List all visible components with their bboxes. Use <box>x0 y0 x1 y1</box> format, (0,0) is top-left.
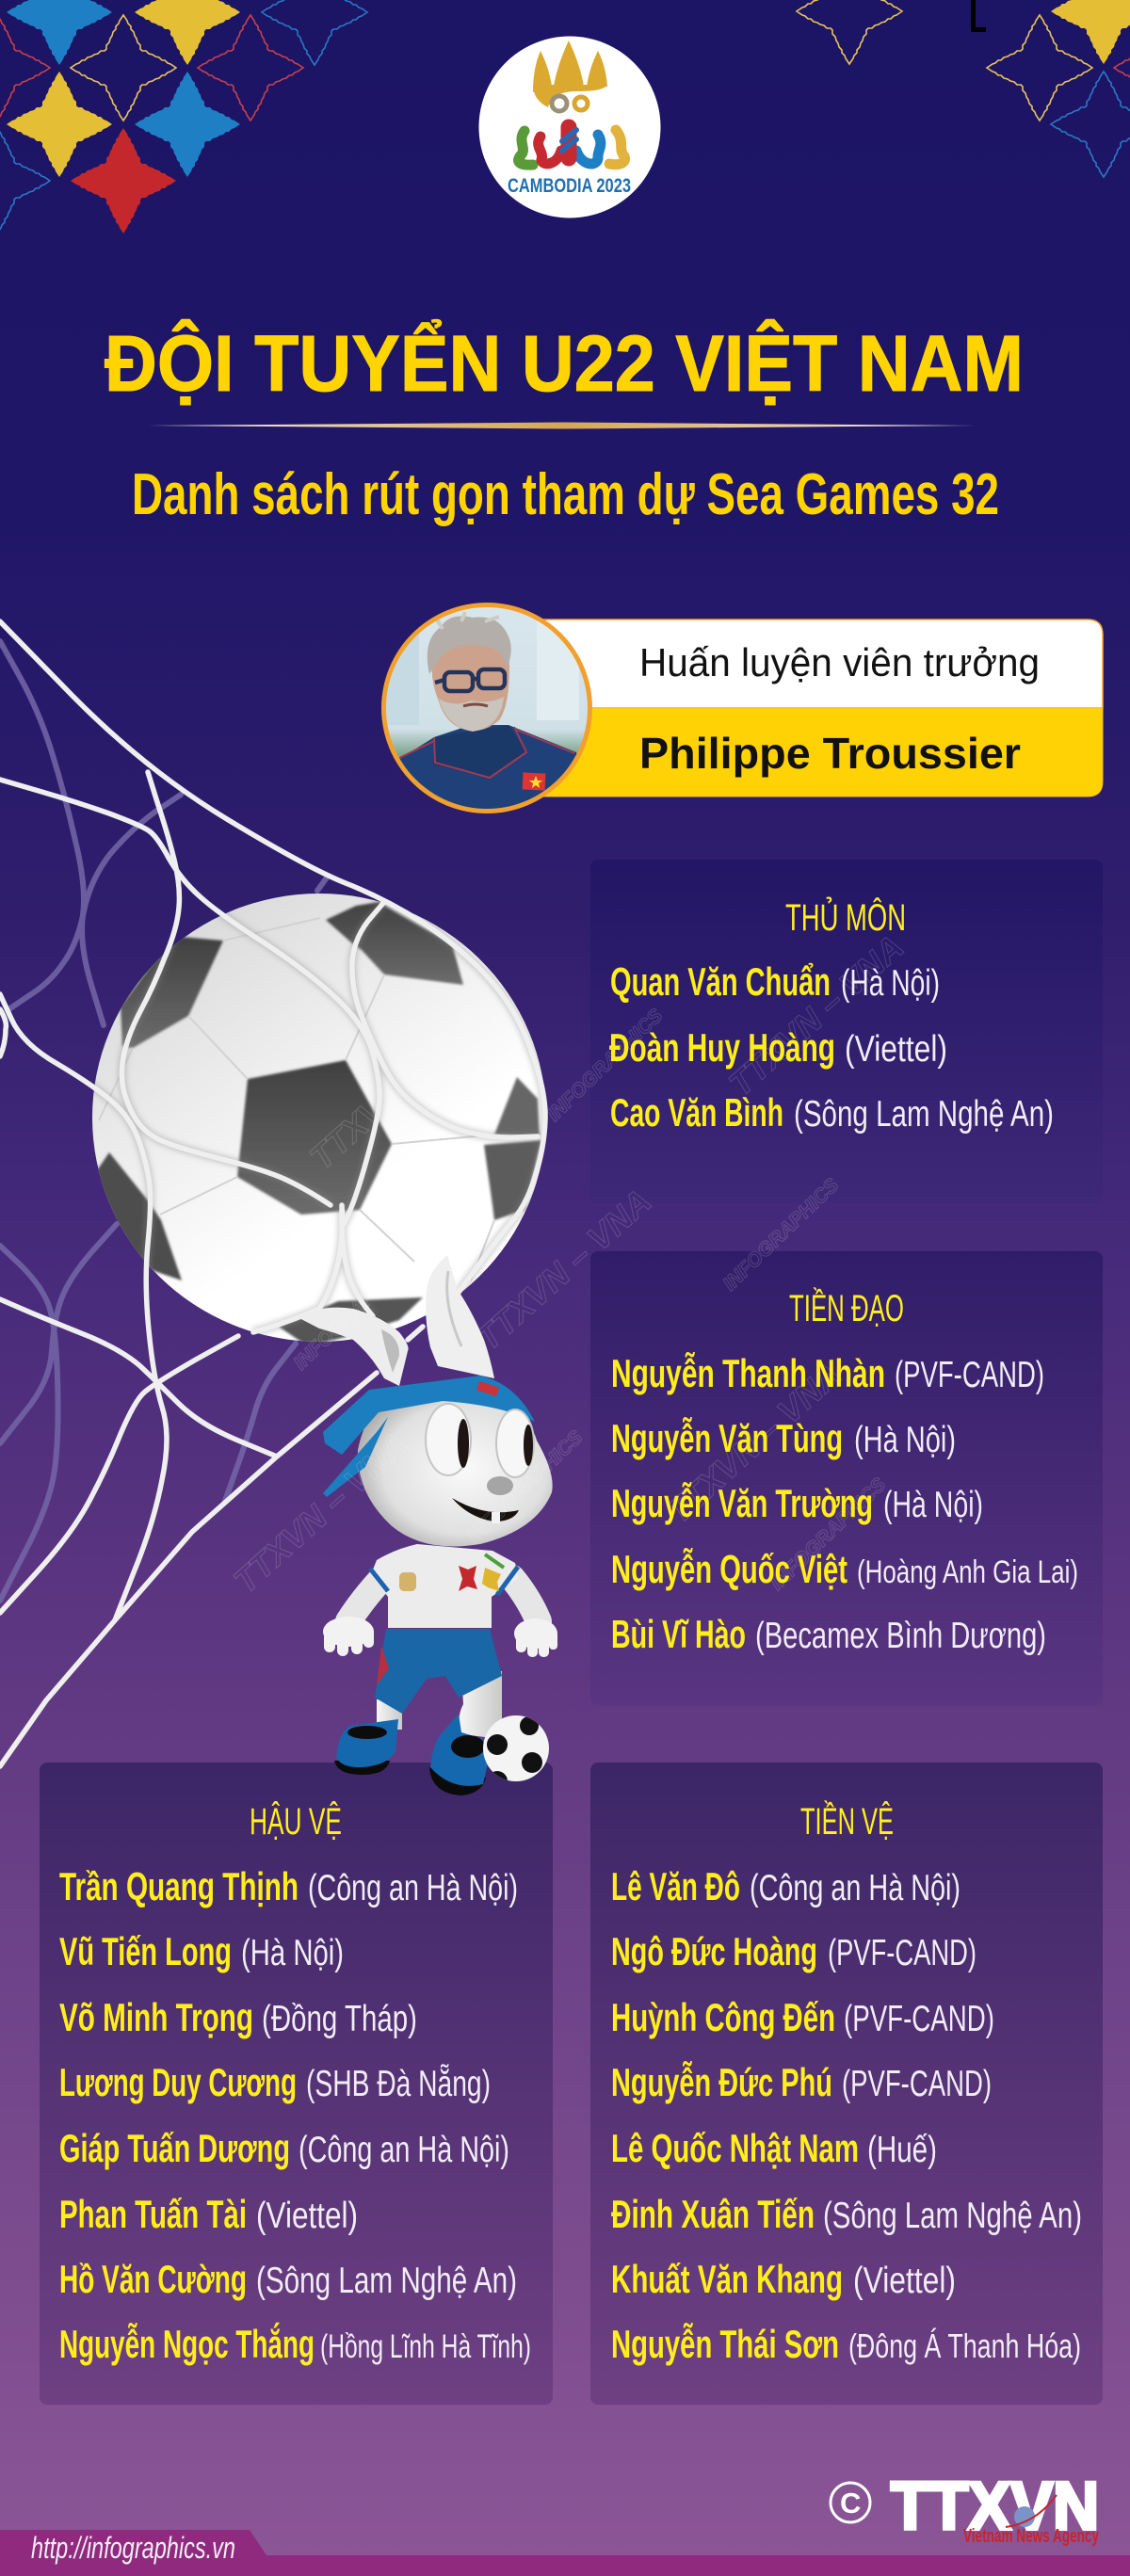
hands <box>323 1617 557 1657</box>
player: Nguyễn Ngọc Thắng: Nguyễn Ngọc Thắng <box>59 2321 315 2366</box>
player: Lê Văn Đô: Lê Văn Đô <box>611 1864 740 1908</box>
headband flag <box>476 1381 499 1396</box>
player: Khuất Văn Khang: Khuất Văn Khang <box>611 2257 843 2301</box>
player: Lương Duy Cương: Lương Duy Cương <box>59 2060 297 2104</box>
player: Đinh Xuân Tiến: Đinh Xuân Tiến <box>611 2192 815 2236</box>
watermarks: INFOGRAPHICS <box>766 1473 890 1595</box>
player: Vũ Tiến Long: Vũ Tiến Long <box>59 1929 232 1973</box>
player: Đoàn Huy Hoàng: (Viettel) <box>845 1029 947 1070</box>
shirt <box>371 1544 519 1628</box>
player: Lê Văn Đô <box>611 1864 960 1908</box>
watermarks: TTXVN – VNA <box>721 927 911 1103</box>
logo label: CAMBODIA 2023 <box>508 175 631 197</box>
watermarks: INFOGRAPHICS <box>542 1005 667 1126</box>
panel: thủ môn content <box>609 895 1054 1135</box>
small soccer ball <box>483 1715 549 1781</box>
watermarks: TTXVN – VNA <box>226 1425 415 1601</box>
heading: hậu vệ: HẬU VỆ <box>250 1800 342 1843</box>
arms <box>348 1578 539 1621</box>
net: front strands <box>0 621 545 1766</box>
coach portrait <box>381 603 593 813</box>
coach role text: Huấn luyện viên trưởng <box>639 640 1040 684</box>
player: Lương Duy Cương: (SHB Đà Nẵng) <box>306 2063 491 2104</box>
player: Lê Quốc Nhật Nam: Lê Quốc Nhật Nam <box>611 2126 859 2170</box>
player: Nguyễn Văn Trường: (Hà Nội) <box>883 1485 983 1525</box>
beard <box>439 697 504 732</box>
player: Hồ Văn Cường <box>59 2257 517 2301</box>
player: Nguyễn Quốc Việt: Nguyễn Quốc Việt <box>611 1546 848 1591</box>
player: Trần Quang Thịnh: (Công an Hà Nội) <box>308 1868 518 1908</box>
player: Ngô Đức Hoàng: Ngô Đức Hoàng <box>611 1929 817 1973</box>
mouth <box>463 704 488 706</box>
watermarks: TTXVN – VNA <box>659 1355 848 1531</box>
player: Bùi Vĩ Hào: Bùi Vĩ Hào <box>611 1612 746 1656</box>
player: Ngô Đức Hoàng: (PVF-CAND) <box>828 1933 977 1973</box>
player: Hồ Văn Cường: (Sông Lam Nghệ An) <box>256 2261 517 2301</box>
player: Huỳnh Công Đến: (PVF-CAND) <box>844 1999 994 2039</box>
mascot: rabbit <box>296 1255 557 1795</box>
watermarks <box>226 927 911 1601</box>
right ear <box>426 1255 494 1378</box>
flag badge <box>523 772 545 791</box>
player: Nguyễn Đức Phú: (PVF-CAND) <box>842 2064 992 2104</box>
panel: tiền đạo background <box>590 1251 1103 1705</box>
shirt <box>399 725 576 809</box>
net: faint back strands <box>0 641 327 1601</box>
player: Đoàn Huy Hoàng: Đoàn Huy Hoàng <box>609 1025 835 1070</box>
player: Nguyễn Đức Phú: Nguyễn Đức Phú <box>611 2059 832 2104</box>
hair <box>428 616 511 674</box>
player: Nguyễn Thái Sơn: Nguyễn Thái Sơn <box>611 2321 839 2366</box>
shoes <box>334 1714 488 1795</box>
player: Quan Văn Chuẩn: (Hà Nội) <box>841 963 940 1004</box>
player: Hồ Văn Cường: Hồ Văn Cường <box>59 2257 247 2301</box>
watermarks: INFOGRAPHICS <box>462 1426 587 1548</box>
player: Đinh Xuân Tiến <box>611 2192 1082 2236</box>
hair tufts <box>435 612 499 629</box>
heading: thủ môn: THỦ MÔN <box>785 895 906 939</box>
player: Vũ Tiến Long: (Hà Nội) <box>241 1933 344 1973</box>
panel: hậu vệ background <box>40 1763 553 2405</box>
shorts pattern <box>377 1646 389 1685</box>
head <box>358 1392 553 1546</box>
watermarks: TTXVN – VNA <box>469 1182 658 1358</box>
player: Phan Tuấn Tài: Phan Tuấn Tài <box>59 2192 247 2236</box>
player: Nguyễn Văn Tùng: Nguyễn Văn Tùng <box>611 1415 843 1460</box>
player: Nguyễn Ngọc Thắng: (Hồng Lĩnh Hà Tĩnh) <box>320 2328 531 2365</box>
copyright mark: C <box>840 2487 861 2520</box>
footer band <box>0 2530 1130 2576</box>
player: Bùi Vĩ Hào <box>611 1612 1046 1656</box>
title: ĐỘI TUYỂN U22 VIỆT NAM <box>105 319 1024 408</box>
coach name bar <box>527 708 1103 797</box>
footer url: http://infographics.vn <box>31 2531 235 2565</box>
player: Võ Minh Trọng: Võ Minh Trọng <box>59 1995 253 2039</box>
logo: SEA Games Cambodia 2023 <box>478 36 661 218</box>
player: Nguyễn Thanh Nhàn: Nguyễn Thanh Nhàn <box>611 1350 885 1395</box>
player: Trần Quang Thịnh: Trần Quang Thịnh <box>59 1864 299 1908</box>
net shadow on ball <box>94 898 542 1335</box>
decoration: star pattern top right <box>797 0 1130 177</box>
legs <box>377 1671 502 1737</box>
teeth <box>492 1512 500 1523</box>
player: Lê Văn Đô: (Công an Hà Nội) <box>750 1868 960 1908</box>
coach role bar <box>527 620 1103 708</box>
player: Nguyễn Văn Trường: Nguyễn Văn Trường <box>611 1480 873 1525</box>
watermarks: TTXVN – VNA <box>302 1001 492 1177</box>
player: Khuất Văn Khang: (Viettel) <box>853 2261 956 2301</box>
player: Võ Minh Trọng: (Đồng Tháp) <box>262 1999 417 2039</box>
player: Nguyễn Thái Sơn <box>611 2321 1081 2366</box>
player: Nguyễn Thanh Nhàn: (PVF-CAND) <box>895 1355 1044 1395</box>
headband <box>323 1376 535 1497</box>
icon: nagas <box>519 127 625 165</box>
panel: hậu vệ content <box>59 1800 531 2366</box>
shorts <box>375 1629 502 1714</box>
player: Lê Quốc Nhật Nam: (Huế) <box>867 2130 937 2170</box>
player: Cao Văn Bình: (Sông Lam Nghệ An) <box>794 1094 1054 1135</box>
player: Giáp Tuấn Dương: Giáp Tuấn Dương <box>59 2126 290 2170</box>
soccer ball <box>92 894 543 1342</box>
player: Huỳnh Công Đến: Huỳnh Công Đến <box>611 1995 835 2039</box>
player: Quan Văn Chuẩn: Quan Văn Chuẩn <box>610 959 831 1004</box>
glasses <box>435 669 505 691</box>
nose <box>487 1476 513 1495</box>
heading: tiền vệ: TIỀN VỆ <box>800 1799 894 1843</box>
title divider <box>148 422 977 429</box>
panel: tiền vệ background <box>590 1763 1103 2405</box>
left ear <box>296 1308 409 1386</box>
panel: thủ môn background <box>590 860 1103 1202</box>
watermarks: INFOGRAPHICS <box>289 1253 413 1375</box>
eyes <box>426 1404 534 1477</box>
player: Phan Tuấn Tài: (Viettel) <box>256 2196 358 2236</box>
player: Cao Văn Bình <box>610 1090 1054 1135</box>
coach name text: Philippe Troussier <box>639 729 1021 778</box>
player: Giáp Tuấn Dương: (Công an Hà Nội) <box>299 2130 509 2170</box>
panel: tiền vệ content <box>611 1799 1082 2366</box>
neck and face <box>431 645 509 731</box>
decoration: star pattern top left <box>0 0 367 233</box>
copyright mark <box>831 2483 870 2522</box>
mouth <box>452 1498 519 1521</box>
shirt stripes and stars <box>370 1554 518 1595</box>
player: Nguyễn Văn Tùng: (Hà Nội) <box>854 1420 956 1460</box>
watermarks: INFOGRAPHICS <box>718 1174 843 1296</box>
icon: emblems <box>552 96 588 111</box>
coach card <box>381 603 1103 813</box>
icon: golden temple <box>533 40 607 107</box>
panel: tiền đạo content <box>611 1286 1078 1656</box>
player: Cao Văn Bình: Cao Văn Bình <box>610 1090 783 1135</box>
heading: tiền đạo: TIỀN ĐẠO <box>789 1286 904 1329</box>
TTXVN logo: TTXVN <box>891 2470 1099 2544</box>
